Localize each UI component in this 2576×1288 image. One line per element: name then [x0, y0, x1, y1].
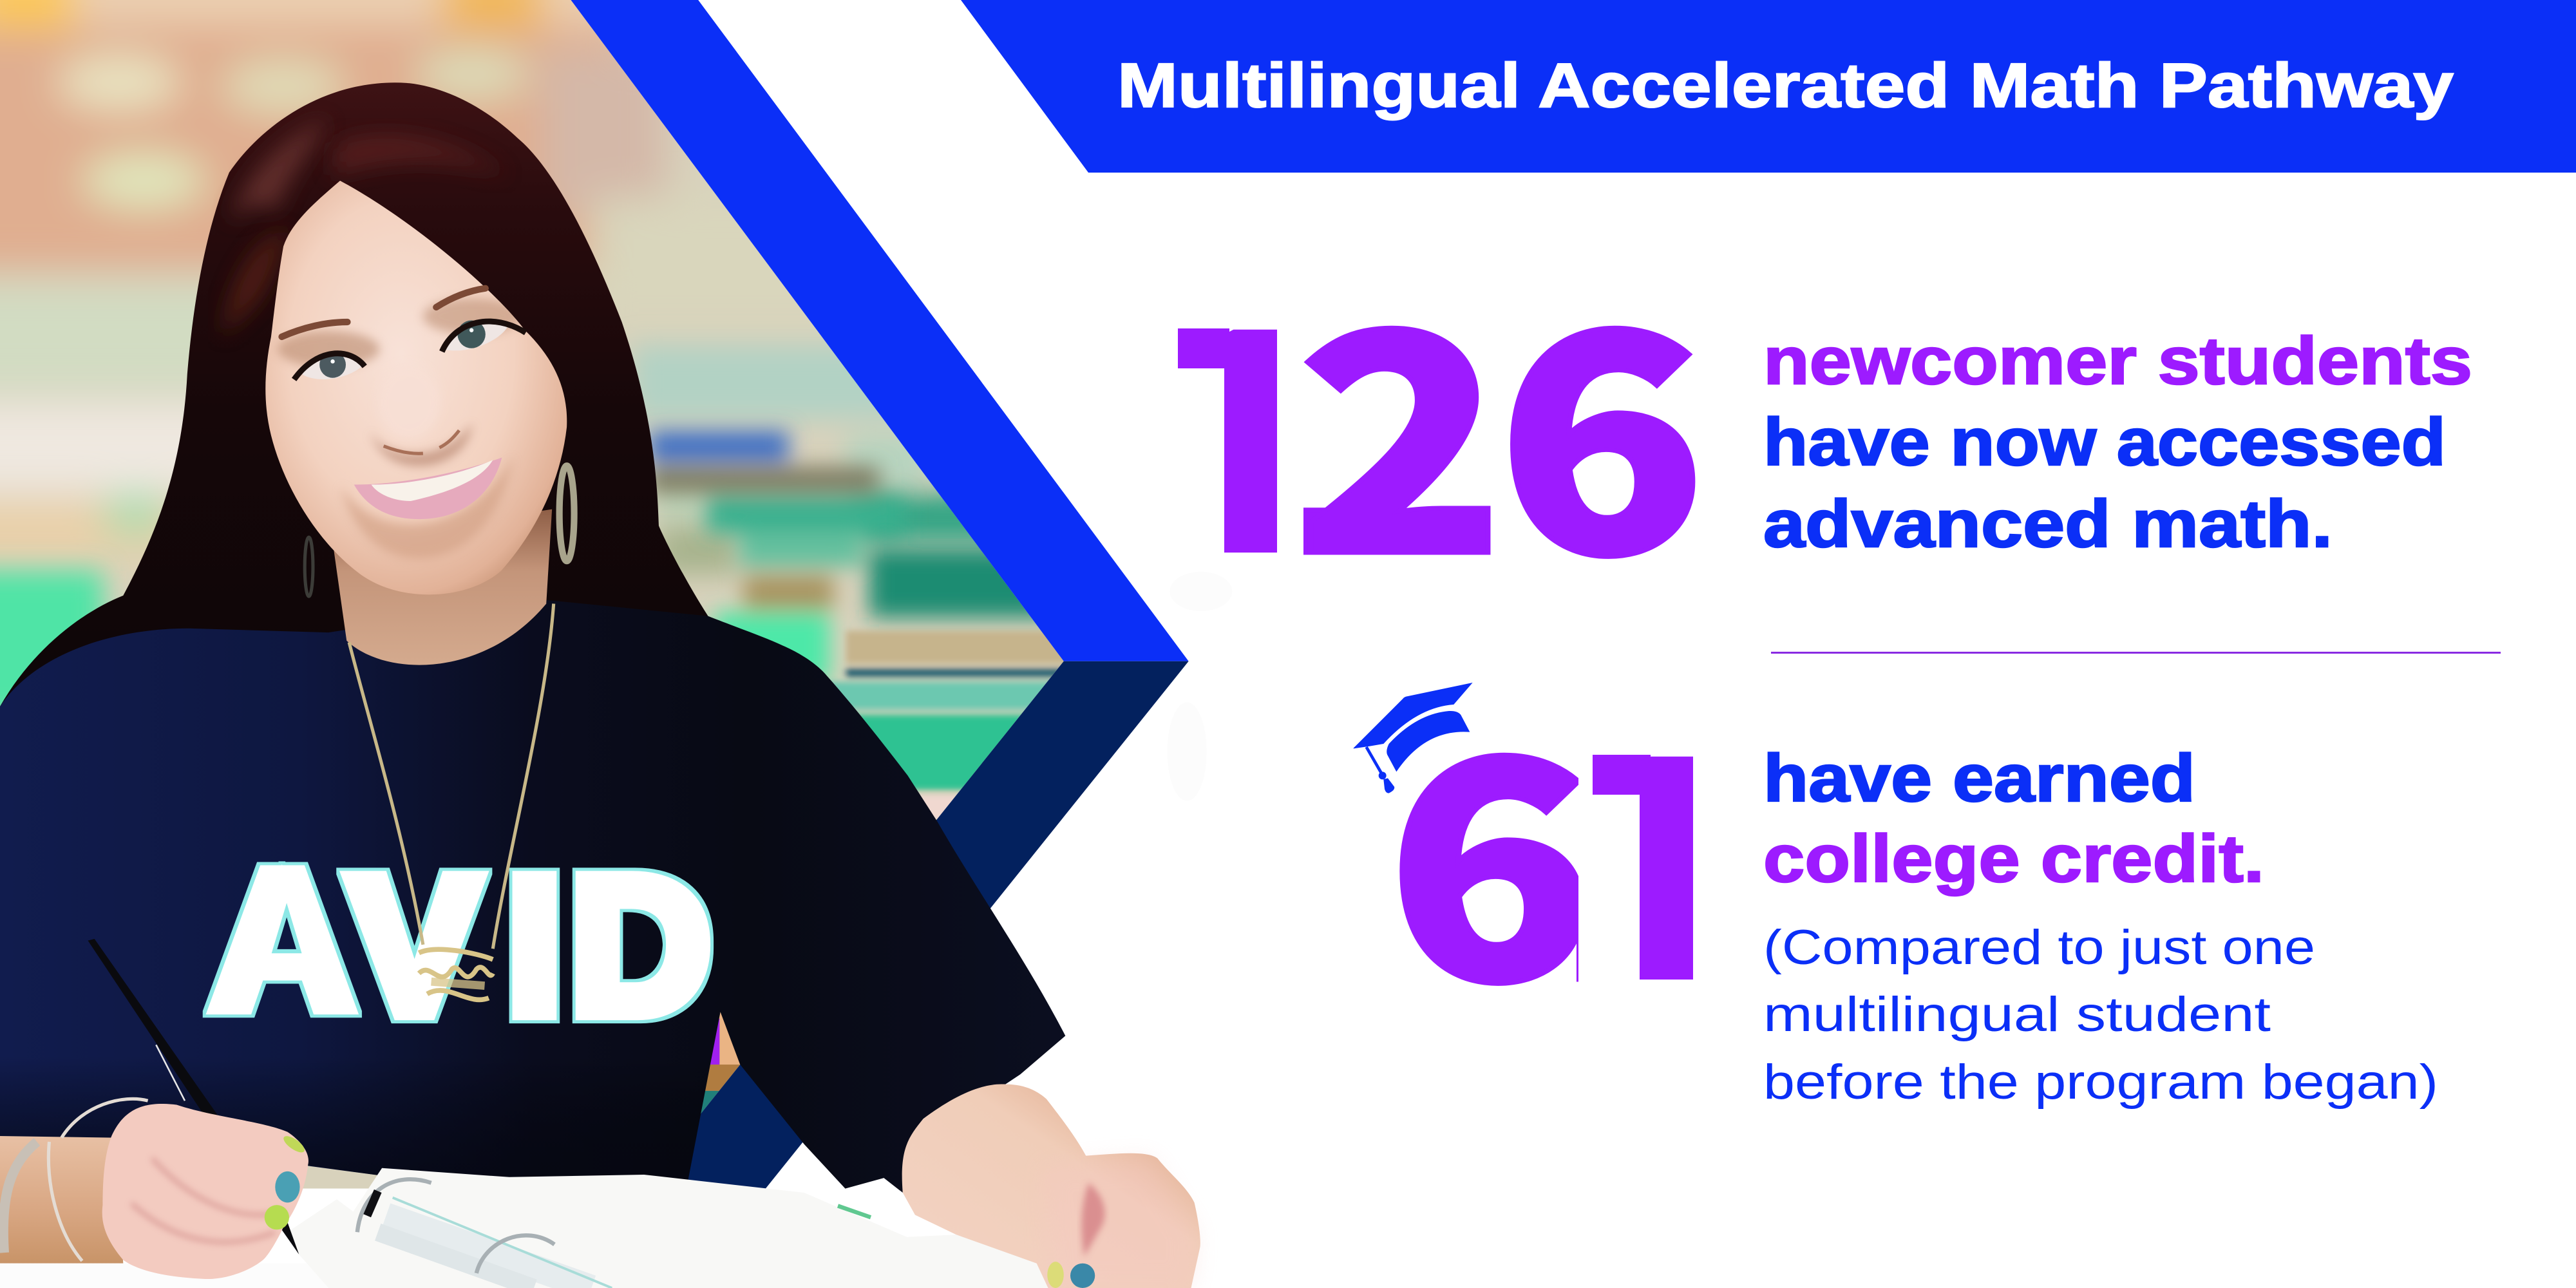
teeth	[372, 460, 493, 501]
stat text: 126	[1763, 324, 2472, 562]
finger creases	[131, 1158, 283, 1242]
big number 126: 126	[1137, 209, 1707, 638]
nails	[265, 1133, 1095, 1288]
header banner	[961, 0, 2576, 173]
notebook paper	[287, 1168, 1048, 1288]
big number 61: 61	[1387, 636, 1761, 1065]
note: comparison to before the program	[1763, 920, 2438, 1110]
nose shading	[370, 423, 472, 466]
face	[265, 181, 567, 594]
line: college credit.: college credit.	[1763, 822, 2264, 896]
faint ghost marks	[1167, 572, 1232, 801]
chevron: bright blue upper arm	[571, 0, 1189, 661]
neck	[333, 509, 552, 665]
right eye shadow	[423, 298, 522, 334]
chevron: navy lower arm	[641, 661, 1189, 1189]
right eye	[442, 320, 526, 352]
hair highlight right of part	[333, 135, 509, 176]
stat text: 61	[1763, 741, 2264, 896]
line: advanced math.: advanced math.	[1763, 487, 2333, 562]
photo: student in AVID shirt over classroom with chevron	[0, 0, 1232, 1288]
binder rings and spiral	[357, 1179, 612, 1288]
white table edge	[0, 1264, 345, 1288]
note line 1: (Compared to just one	[1763, 920, 2315, 975]
line: have now accessed: have now accessed	[1763, 405, 2446, 480]
left forearm	[0, 1136, 123, 1264]
big number 61	[1399, 752, 1693, 986]
earrings	[305, 466, 574, 596]
hair highlight left of part	[230, 119, 328, 222]
t-shirt	[0, 600, 1065, 1193]
lower body shading	[0, 822, 721, 1183]
auburn strands beside forehead	[222, 230, 289, 337]
A counter	[274, 910, 299, 951]
note line 3: before the program began)	[1763, 1055, 2438, 1110]
cheek/chin shade around mouth	[341, 456, 513, 558]
name pendant	[419, 949, 493, 999]
left eye	[294, 352, 365, 379]
bracelets	[3, 1099, 148, 1261]
eyebrows	[281, 289, 486, 337]
finger crease	[1081, 1183, 1105, 1257]
nostril line	[384, 430, 459, 453]
line: newcomer students: newcomer students	[1763, 324, 2472, 399]
note line 2: multilingual student	[1763, 987, 2271, 1042]
left hand	[102, 1104, 308, 1279]
upper and lower lips	[354, 457, 502, 519]
student	[0, 82, 1200, 1288]
blurred classroom background	[0, 0, 1076, 1191]
AVID lettering: AVID	[213, 831, 710, 1053]
gold necklace	[349, 603, 554, 999]
icon: graduation cap	[1354, 683, 1473, 793]
nose highlight	[378, 366, 440, 439]
hair	[0, 82, 708, 739]
green paper edge	[838, 1206, 871, 1217]
pen	[88, 939, 299, 1255]
hand pink tone	[1043, 1158, 1195, 1288]
line: have earned: have earned	[1763, 741, 2195, 816]
title: Multilingual Accelerated Math Pathway	[1117, 50, 2454, 120]
left eye shadow	[278, 331, 379, 367]
divider	[1771, 652, 2501, 654]
right arm and hand	[902, 1084, 1200, 1288]
big number 126	[1178, 326, 1695, 559]
